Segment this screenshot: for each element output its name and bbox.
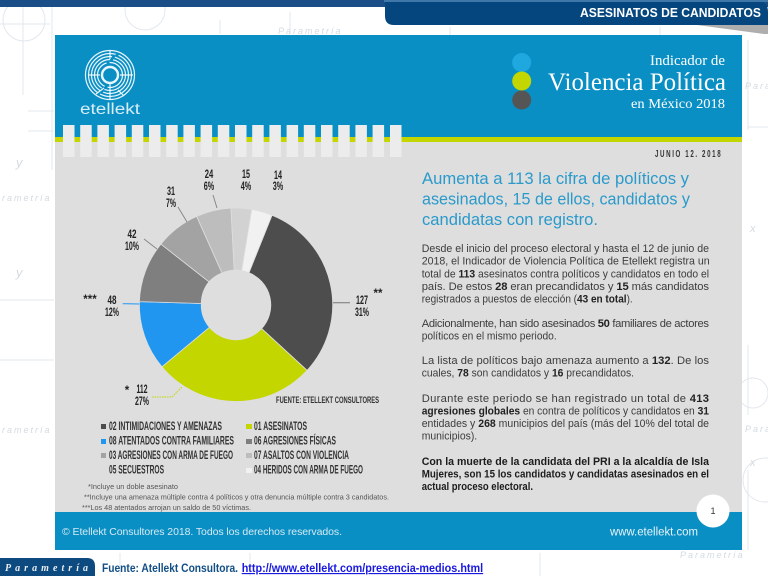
source line with link: http://www.etellekt.com/presencia-medios.html <box>242 563 483 575</box>
chart legend <box>101 421 363 476</box>
chart data labels: ** <box>374 288 383 300</box>
text block: summary: Desde el inicio del proceso electoral y hasta el 12 de junio de <box>422 243 709 255</box>
brand tab: Parametría <box>0 558 95 576</box>
chart footnotes <box>82 482 389 512</box>
text block: relatives: Adicionalmente, han sido asesinados 50 familiares de actores <box>422 318 709 330</box>
chart data labels: 24 <box>205 169 214 181</box>
article headline: asesinados, 15 de ellos, candidatos y <box>422 190 690 208</box>
text block: threats: cuales, 78 son candidatos y 16 precandidatos. <box>422 368 634 380</box>
source line with link: Fuente: Atellekt Consultora. <box>102 563 238 575</box>
page number badge <box>696 494 730 528</box>
infographic page: Parametría <box>278 26 343 36</box>
text block: summary: total de 113 asesinatos contra políticos y candidatos en todo el <box>422 268 709 280</box>
text block: conclusion <box>422 456 710 493</box>
chart data labels: 31% <box>355 307 369 319</box>
text block: threats <box>422 355 709 380</box>
chart source: FUENTE: ETELLEKT CONSULTORES <box>276 395 379 406</box>
report title: Violencia Política <box>548 69 726 96</box>
article headline: Aumenta a 113 la cifra de políticos y <box>422 169 689 188</box>
chart data labels: * <box>125 385 130 397</box>
text block: summary: 2018, el Indicador de Violencia Política de Etellekt registra un <box>422 256 710 268</box>
chart data labels: 15 <box>242 169 250 181</box>
chart legend: 01 ASESINATOS <box>254 421 307 433</box>
text block: threats: La lista de políticos bajo amenaza aumento a 132. De los <box>422 355 709 367</box>
chart data labels: 10% <box>125 241 139 253</box>
chart legend: 06 AGRESIONES FÍSICAS <box>254 434 336 448</box>
report title: Indicador de <box>650 53 725 69</box>
top header ribbon <box>0 0 768 34</box>
panel footer band <box>55 512 742 550</box>
infographic page: y <box>15 155 24 170</box>
infographic page: Parametría <box>680 550 745 560</box>
chart data labels <box>83 169 383 408</box>
text block: aggressions: municipios). <box>422 431 477 443</box>
chart footnotes: **Incluye una amenaza múltiple contra 4 políticos y otra denuncia múltiple contra 3 candidatos. <box>84 492 389 502</box>
infographic page: y <box>15 265 24 280</box>
text block: aggressions: entidades y 268 municipios del país (más del 10% del total de <box>422 418 709 430</box>
chart data labels: 48 <box>108 295 117 307</box>
text block: aggressions: agresiones globales en contra de políticos y candidatos en 31 <box>422 406 709 418</box>
text block: aggressions <box>422 393 709 443</box>
chart data labels: 6% <box>204 181 214 193</box>
chart leader lines <box>123 195 350 397</box>
infographic page: rametría <box>2 193 52 203</box>
chart legend: 07 ASALTOS CON VIOLENCIA <box>254 450 349 462</box>
chart data labels: *** <box>83 294 97 306</box>
notebook teeth <box>63 125 402 157</box>
chart legend: 08 ATENTADOS CONTRA FAMILIARES <box>109 436 234 448</box>
icon: three indicator dots <box>512 53 531 110</box>
chart data labels: 127 <box>356 295 368 307</box>
chart legend: 05 SECUESTROS <box>109 464 164 476</box>
chart data labels: 4% <box>241 181 251 193</box>
chart data labels: 3% <box>273 181 283 193</box>
report title <box>548 53 726 111</box>
chart data labels: 7% <box>166 198 176 210</box>
chart legend: 02 INTIMIDACIONES Y AMENAZAS <box>109 421 222 433</box>
ribbon title: ASESINATOS DE CANDIDATOS <box>580 6 761 20</box>
text block: summary <box>422 243 710 306</box>
chart legend: 04 HERIDOS CON ARMA DE FUEGO <box>254 464 363 476</box>
infographic page: rametría <box>2 425 52 435</box>
text block: conclusion: Mujeres, son 15 los candidatos y candidatas asesinados en el <box>422 469 709 481</box>
date: JUNIO 12. 2018 <box>655 147 722 159</box>
chart legend: 03 AGRESIONES CON ARMA DE FUEGO <box>109 450 233 462</box>
text block: relatives: políticos en el mismo periodo. <box>422 330 557 342</box>
brand tab: Parametría: Parametría <box>5 563 88 574</box>
website: www.etellekt.com <box>609 526 698 538</box>
logo: etellekt labyrinth <box>80 50 141 118</box>
panel header band <box>55 35 742 142</box>
article headline: candidatas con registro. <box>422 210 598 229</box>
chart footnotes: *Incluye un doble asesinato <box>88 482 178 491</box>
chart footnotes: ***Los 48 atentados arrojan un saldo de 50 víctimas. <box>82 503 251 512</box>
article headline <box>422 169 690 229</box>
text block: summary: país. De estos 28 eran precandidatos y 15 más candidatos <box>422 281 709 293</box>
text block: relatives <box>422 318 709 342</box>
chart data labels: 12% <box>105 307 119 319</box>
page number badge: 1 <box>710 506 716 516</box>
report title: en México 2018 <box>631 96 725 111</box>
text block: conclusion: Con la muerte de la candidata del PRI a la alcaldía de Isla <box>422 456 710 468</box>
chart data labels: 42 <box>128 229 136 241</box>
chart data labels: 14 <box>274 170 282 182</box>
chart data labels: 31 <box>167 186 175 198</box>
source line with link <box>102 563 483 575</box>
text block: aggressions: Durante este periodo se han registrado un total de 413 <box>422 393 709 405</box>
copyright: © Etellekt Consultores 2018. Todos los derechos reservados. <box>62 526 342 538</box>
chart data labels: 27% <box>135 396 149 408</box>
infographic page: x <box>749 223 756 235</box>
donut chart <box>139 208 333 401</box>
panel: report card <box>55 35 742 550</box>
infographic page: x <box>749 457 756 469</box>
text block: summary: registrados a puestos de elección (43 en total). <box>422 294 633 306</box>
text block: conclusion: actual proceso electoral. <box>422 481 533 493</box>
chart data labels: 112 <box>136 384 148 396</box>
logo: etellekt labyrinth: etellekt <box>80 101 141 118</box>
